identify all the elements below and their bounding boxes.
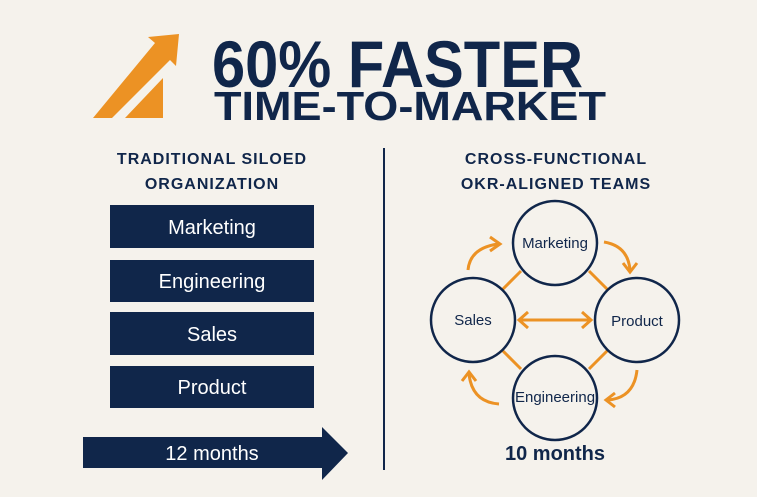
diagram: team circles bbox=[431, 201, 679, 440]
panel: silo boxes: Sales bbox=[187, 324, 237, 346]
arrow: 12 months bbox=[83, 427, 348, 480]
panel: silo boxes: Product bbox=[178, 377, 247, 399]
heading: traditional: ORGANIZATION bbox=[145, 176, 279, 193]
label: 10 months: 10 months bbox=[505, 443, 605, 465]
heading: traditional: TRADITIONAL SILOED bbox=[117, 151, 307, 168]
panel: silo boxes: Engineering bbox=[159, 271, 265, 293]
panel: silo boxes bbox=[110, 205, 314, 408]
arrow: 12 months: 12 months bbox=[165, 443, 259, 465]
panel: silo boxes: Marketing bbox=[168, 217, 256, 239]
diagram: team circles: Engineering bbox=[515, 389, 595, 406]
diagram: team circles: Sales bbox=[454, 312, 492, 329]
title: TIME-TO-MARKET bbox=[214, 83, 606, 129]
heading: cross-functional: OKR-ALIGNED TEAMS bbox=[461, 176, 651, 193]
diagram: team circles: Product bbox=[611, 313, 664, 330]
icon: growth arrow bbox=[93, 34, 179, 118]
heading: cross-functional: CROSS-FUNCTIONAL bbox=[465, 151, 647, 168]
title: 60% FASTER bbox=[212, 27, 583, 101]
diagram: team circles: Marketing bbox=[522, 235, 588, 252]
heading: cross-functional bbox=[461, 151, 651, 193]
heading: traditional bbox=[117, 151, 307, 193]
